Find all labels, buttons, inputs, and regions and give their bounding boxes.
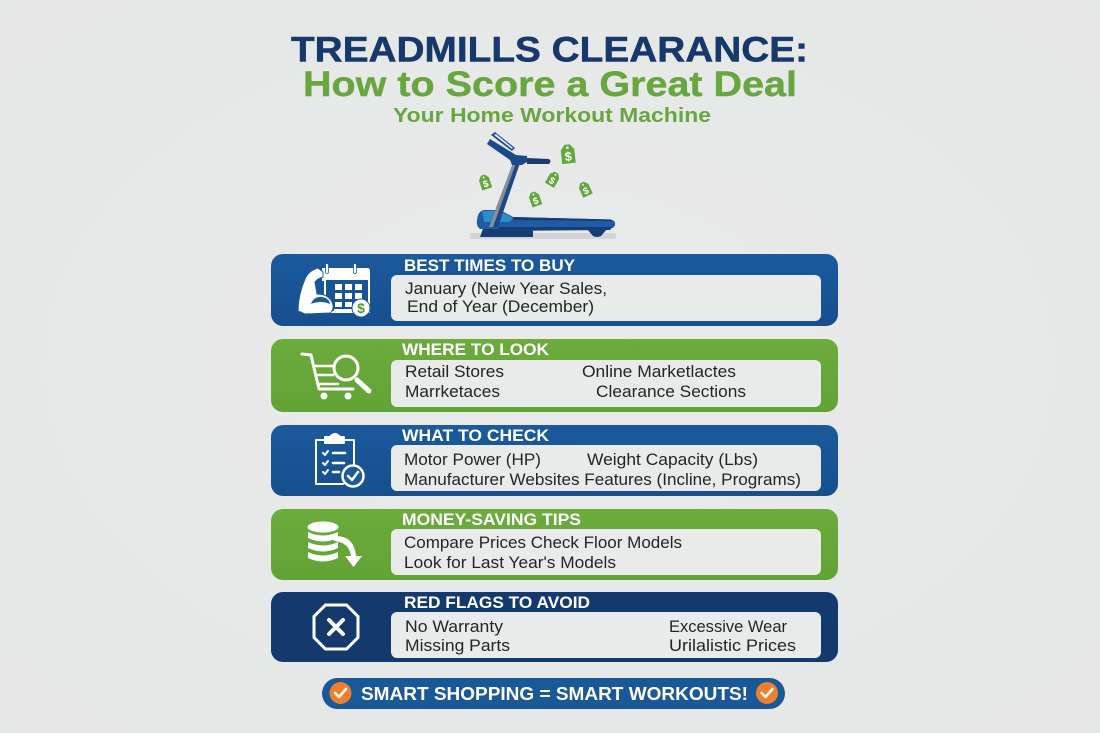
icon: clipboard checklist xyxy=(316,434,364,486)
title xyxy=(291,30,808,127)
body text: Marrketaces xyxy=(405,383,500,401)
body text: Missing Parts xyxy=(405,637,510,655)
body text: January (Neiw Year Sales, xyxy=(405,280,607,298)
body text: Weight Capacity (Lbs) xyxy=(587,451,758,469)
title line 1: TREADMILLS CLEARANCE: xyxy=(291,30,808,70)
body text: Manufacturer Websites Features (Incline, Programs) xyxy=(404,471,801,489)
price tags xyxy=(560,144,576,164)
text box xyxy=(391,612,821,658)
body text: Compare Prices Check Floor Models xyxy=(404,534,682,552)
panel: where to look xyxy=(271,339,838,412)
heading: WHAT TO CHECK xyxy=(402,427,549,445)
icon: arm and calendar: $ xyxy=(357,300,365,316)
body text xyxy=(405,618,796,655)
body text: End of Year (December) xyxy=(407,298,594,316)
icon: cart and magnifier xyxy=(302,354,369,400)
heading: MONEY-SAVING TIPS xyxy=(402,511,581,529)
subtitle: Your Home Workout Machine xyxy=(393,105,711,127)
text box xyxy=(391,360,821,407)
body text: Look for Last Year's Models xyxy=(404,554,616,572)
floor shadow xyxy=(470,233,616,239)
body text xyxy=(404,451,801,489)
illustration: treadmill with price tags xyxy=(470,132,616,239)
body text: Motor Power (HP) xyxy=(404,451,541,469)
deck xyxy=(477,210,615,229)
body text: Excessive Wear xyxy=(669,618,788,636)
body text xyxy=(404,534,682,572)
heading: BEST TIMES TO BUY xyxy=(404,257,575,275)
panel: red flags to avoid xyxy=(271,592,838,662)
icon: coin stack with arrow xyxy=(308,522,362,567)
icon: arm and calendar xyxy=(298,264,370,317)
body text: Retail Stores xyxy=(405,363,504,381)
text box xyxy=(391,529,821,575)
text box xyxy=(391,275,821,321)
column xyxy=(489,163,520,227)
body text: Urilalistic Prices xyxy=(669,637,796,655)
base xyxy=(480,223,533,237)
icon: stop sign with x xyxy=(314,605,358,649)
heading: RED FLAGS TO AVOID xyxy=(404,594,590,612)
slogan: SMART SHOPPING = SMART WORKOUTS! xyxy=(361,684,748,704)
text box xyxy=(391,445,821,491)
panel: what to check xyxy=(271,425,838,496)
console and handle xyxy=(487,139,527,165)
panel: best times to buy xyxy=(271,254,838,326)
body text xyxy=(405,280,607,316)
panel: money-saving tips xyxy=(271,509,838,580)
title line 2: How to Score a Great Deal xyxy=(303,65,797,104)
body text: Clearance Sections xyxy=(596,383,746,401)
body text: No Warranty xyxy=(405,618,504,636)
icon: left check xyxy=(330,682,352,704)
heading: WHERE TO LOOK xyxy=(402,341,549,359)
body text: Online Marketlactes xyxy=(582,363,736,381)
icon: right check xyxy=(756,682,778,704)
foot xyxy=(587,229,607,237)
callout: smart shopping pill xyxy=(322,678,785,709)
body text xyxy=(405,363,746,401)
